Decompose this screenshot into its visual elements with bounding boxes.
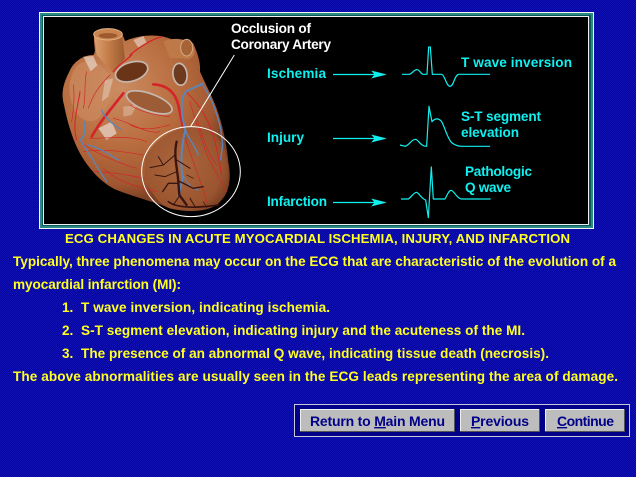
red arteries bbox=[72, 37, 227, 202]
ECG captions: elevation bbox=[461, 125, 519, 140]
panel: heart and ECG illustration bbox=[40, 12, 594, 228]
ECG captions: Pathologic bbox=[465, 164, 532, 179]
row labels: Infarction bbox=[267, 194, 327, 209]
infarct dark vessels bbox=[150, 142, 218, 208]
label: occlusion of coronary artery: Coronary Artery bbox=[231, 37, 331, 52]
button: return to main menu bbox=[300, 409, 455, 432]
vessel ring three bbox=[172, 62, 188, 86]
left atrium lobe bbox=[70, 61, 114, 121]
button: previous bbox=[460, 409, 540, 432]
button bar bbox=[294, 404, 630, 436]
vessel ring two bbox=[124, 86, 175, 119]
button: previous: Previous bbox=[471, 413, 529, 429]
ECG: T wave inversion bbox=[402, 47, 490, 86]
arrows bbox=[333, 71, 386, 206]
numbered list: T wave inversion, indicating ischemia. bbox=[81, 300, 330, 315]
intro text: myocardial infarction (MI): bbox=[13, 277, 181, 292]
row labels: Injury bbox=[267, 130, 304, 145]
label: occlusion of coronary artery: Occlusion of bbox=[231, 21, 311, 36]
row labels bbox=[267, 66, 327, 209]
pulmonary vessel right bbox=[163, 39, 195, 59]
pointer line bbox=[191, 55, 234, 126]
heart illustration bbox=[63, 29, 240, 217]
ECG captions bbox=[461, 55, 572, 195]
ECG traces bbox=[400, 47, 491, 218]
ECG captions: T wave inversion bbox=[461, 55, 572, 70]
button: return to main menu: Return to Main Menu bbox=[310, 413, 445, 429]
numbered list: 1. bbox=[62, 300, 73, 315]
apex shading bbox=[145, 127, 229, 211]
numbered list: S-T segment elevation, indicating injury and the acuteness of the MI. bbox=[81, 323, 525, 338]
ECG: S-T segment elevation bbox=[400, 106, 490, 146]
row labels: Ischemia bbox=[267, 66, 326, 81]
ECG captions: Q wave bbox=[465, 180, 511, 195]
blue veins bbox=[80, 84, 223, 197]
vessel ring one bbox=[113, 58, 150, 86]
aorta bbox=[94, 34, 125, 73]
heart body bbox=[63, 30, 230, 210]
ECG captions: S-T segment bbox=[461, 109, 541, 124]
fat highlights bbox=[83, 36, 182, 140]
closing text: The above abnormalities are usually seen in the ECG leads representing the area of damage. bbox=[13, 369, 618, 384]
heading: ECG CHANGES IN ACUTE MYOCARDIAL ISCHEMIA, INJURY, AND INFARCTION bbox=[65, 231, 570, 246]
intro text: Typically, three phenomena may occur on the ECG that are characteristic of the evolution of a bbox=[13, 254, 616, 269]
numbered list: 2. bbox=[62, 323, 73, 338]
ECG: pathologic Q wave bbox=[401, 167, 491, 218]
numbered list: 3. bbox=[62, 346, 73, 361]
button: continue bbox=[545, 409, 625, 432]
numbered list bbox=[62, 300, 549, 361]
numbered list: The presence of an abnormal Q wave, indicating tissue death (necrosis). bbox=[81, 346, 549, 361]
label: occlusion of coronary artery bbox=[231, 21, 331, 52]
intro text bbox=[13, 254, 616, 292]
button: continue: Continue bbox=[557, 413, 614, 429]
occlusion circle bbox=[142, 127, 240, 217]
